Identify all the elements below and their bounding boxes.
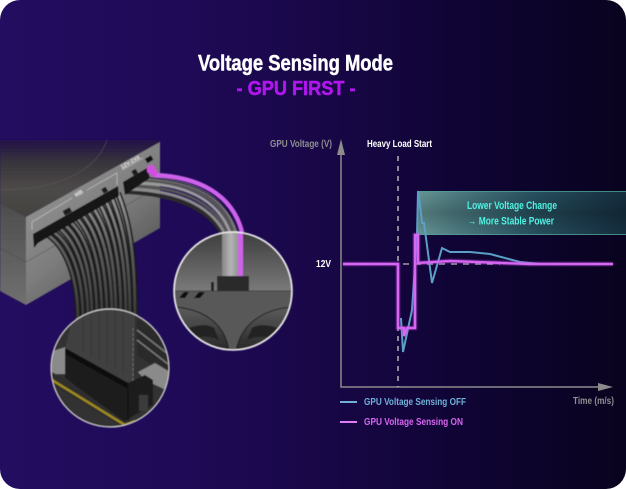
power supply unit <box>0 140 160 305</box>
highlighted band <box>417 191 626 235</box>
12V dashed reference <box>403 263 500 265</box>
title <box>198 50 393 100</box>
24-pin connector <box>33 186 119 248</box>
inset circle: GPU connector <box>174 230 293 352</box>
GPU socket <box>217 276 249 291</box>
8-pin cable bundle <box>125 175 242 232</box>
black 24-pin plug <box>65 348 153 421</box>
magenta connector <box>147 164 158 178</box>
24-pin cable bundle <box>42 193 135 320</box>
12V label: 12V <box>316 259 331 270</box>
yellow motherboard stripe <box>52 380 135 425</box>
8-pin connector <box>123 168 150 195</box>
legend text OFF: GPU Voltage Sensing OFF <box>364 396 466 408</box>
band text: Lower Voltage Change <box>467 200 557 212</box>
legend swatch OFF <box>340 401 357 403</box>
socket <box>145 155 153 163</box>
legend <box>340 396 466 428</box>
chart: voltage response <box>270 139 626 407</box>
x axis label: Time (m/s) <box>573 396 614 407</box>
load start dashed line <box>397 156 399 387</box>
magenta sense wire <box>155 175 242 232</box>
line: sensing OFF <box>401 191 540 352</box>
fans <box>174 307 229 352</box>
heavy load label: Heavy Load Start <box>367 139 433 150</box>
x axis arrow <box>598 383 613 391</box>
y axis label: GPU Voltage (V) <box>270 139 332 150</box>
subtitle: - GPU FIRST - <box>236 77 356 100</box>
band text line 2: → More Stable Power <box>468 216 555 228</box>
y axis <box>341 150 604 387</box>
inset circle: motherboard connector <box>50 310 169 427</box>
legend swatch ON <box>340 421 357 423</box>
y axis arrow <box>337 139 345 155</box>
legend text ON: GPU Voltage Sensing ON <box>364 416 463 428</box>
GPU cable <box>222 230 239 276</box>
label: 12V-2X6: 12V-2X6 <box>120 155 141 171</box>
line: sensing ON <box>343 235 613 336</box>
title: Voltage Sensing Mode <box>198 50 393 76</box>
inset circle outline <box>174 232 292 350</box>
inset circle outline <box>51 309 169 427</box>
label: MB: MB <box>74 189 84 199</box>
illustration: power supply with cables <box>0 140 293 455</box>
